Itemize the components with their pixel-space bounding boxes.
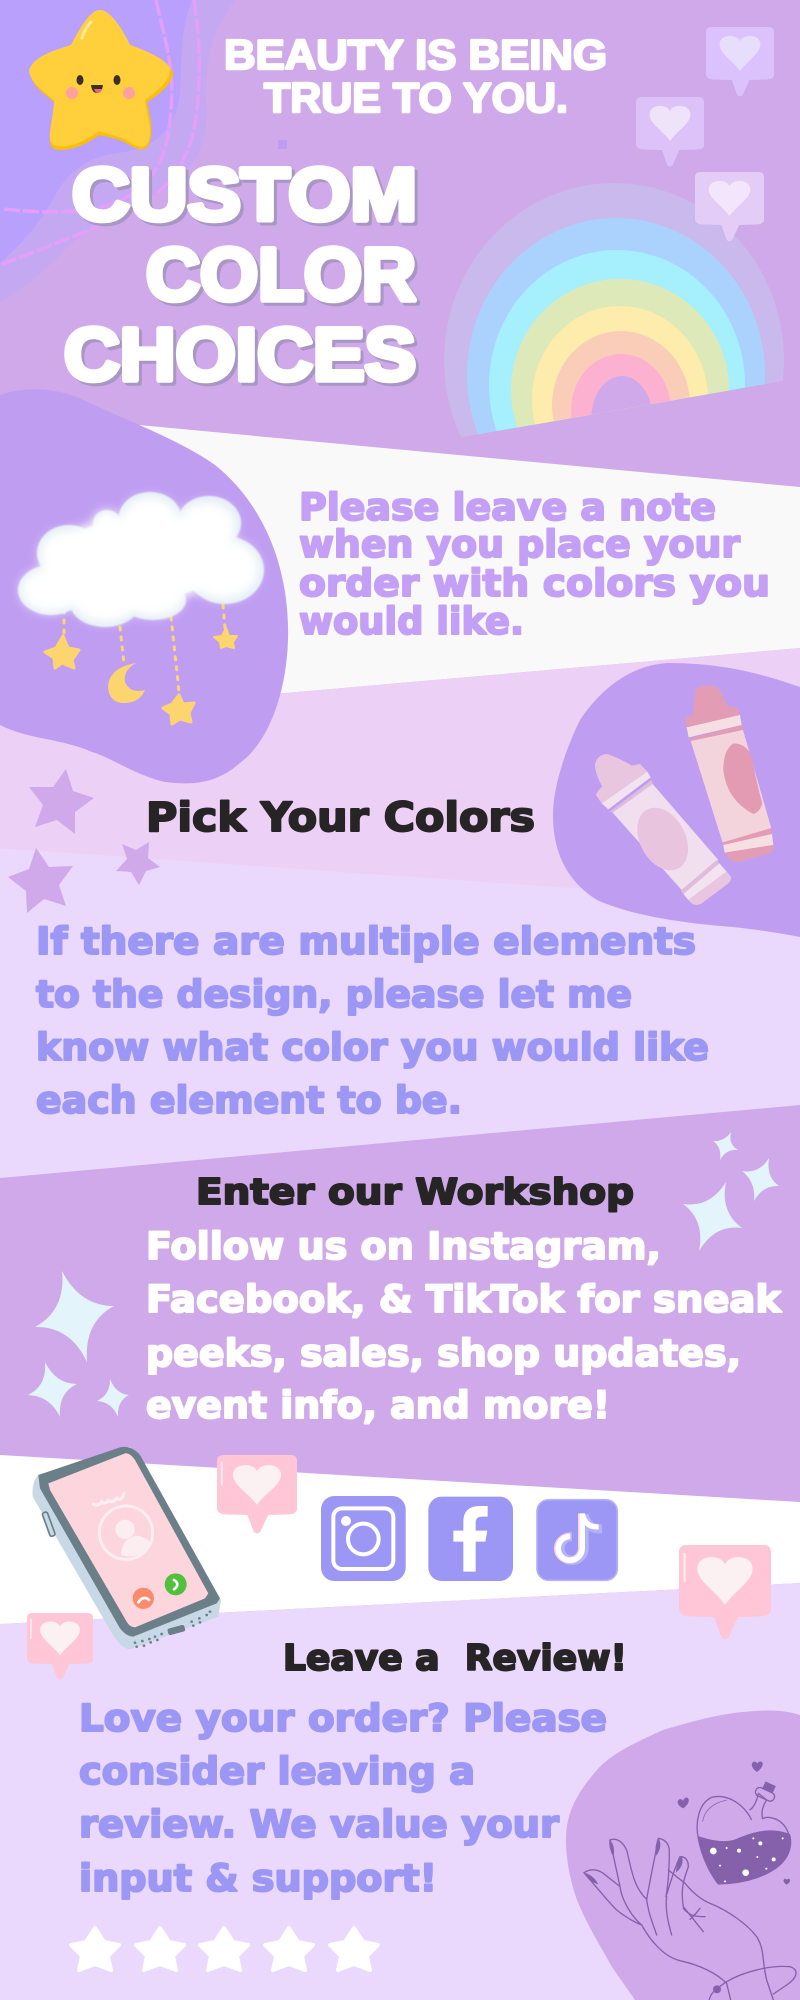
decorative star B [8, 848, 73, 913]
panel: white social band [0, 1455, 800, 1624]
star mid [163, 695, 194, 724]
icon: crayons [595, 685, 774, 905]
cloud body [21, 497, 259, 622]
icon: heart bubble 2 [636, 97, 704, 166]
panel: pink band [0, 648, 800, 910]
text block: follow us: peeks, sales, shop updates, [146, 1332, 741, 1375]
sparkles [28, 1132, 779, 1417]
rating stars [71, 1928, 378, 1970]
hand outline [584, 1838, 796, 2000]
potion liquid [698, 1830, 791, 1884]
text block: leave a note: when you place your [299, 523, 741, 566]
blob: right violet [553, 663, 800, 937]
star right [214, 628, 237, 648]
decorative star C [116, 842, 160, 885]
text block: love your order: review. We value your [79, 1803, 560, 1846]
chains [64, 605, 225, 692]
crayon: rose [685, 685, 774, 862]
potion sparkles [710, 1837, 784, 1882]
text block: multiple elements: to the design, please let me [36, 973, 632, 1016]
heading: pick your colors: Pick Your Colors [146, 795, 535, 841]
icon: yellow star mascot [29, 10, 173, 150]
blob: left violet [0, 389, 288, 783]
potion cork [762, 1781, 776, 1793]
text block: love your order: consider leaving a [79, 1750, 475, 1793]
text block: follow us: Facebook, & TikTok for sneak [146, 1278, 782, 1321]
decorative star A [29, 769, 94, 834]
text block: leave a note: order with colors you [299, 562, 770, 605]
social icons row [321, 1496, 617, 1581]
nails [584, 1838, 721, 1993]
text block: multiple elements [36, 920, 709, 1122]
crayon: pale pink [595, 754, 731, 905]
text block: follow us: Follow us on Instagram, [146, 1225, 661, 1268]
title [64, 153, 417, 396]
icon: heart bubble 3 [695, 172, 764, 241]
text block: multiple elements: know what color you would like [36, 1026, 709, 1069]
tagline: TRUE TO YOU. [264, 74, 568, 121]
icon: cloud with hanging stars and moon [18, 492, 264, 724]
panel: workshop band [0, 1105, 800, 1502]
moon [108, 663, 145, 703]
tagline [224, 31, 607, 121]
text block: love your order: Love your order? Please [79, 1697, 607, 1740]
icon: tiktok [537, 1500, 617, 1580]
speaker dots [134, 1610, 211, 1648]
small square mark [278, 140, 287, 149]
icon: phone [33, 1447, 221, 1649]
text block: leave a note [299, 486, 770, 643]
text block: multiple elements: If there are multiple elements [36, 920, 696, 963]
icon: heart bubble 1 [706, 27, 774, 96]
title: CUSTOM [72, 153, 417, 236]
blob: bottom right [566, 1710, 800, 2000]
icon: hand with heart potion [584, 1761, 796, 2000]
phone bezel [38, 1447, 220, 1637]
icon: pink heart bubble right [679, 1545, 771, 1639]
title: COLOR [146, 233, 416, 316]
panel: lilac band [0, 848, 800, 1200]
side button [42, 1511, 56, 1537]
phone case [33, 1447, 221, 1649]
phone screen [48, 1453, 208, 1627]
icon: instagram [321, 1496, 406, 1581]
text block: love your order [79, 1697, 607, 1900]
name squiggle [93, 1493, 124, 1505]
text block: follow us: event info, and more! [146, 1384, 610, 1427]
heading: leave a review: Leave a Review! [283, 1638, 627, 1679]
panel: review lilac band [0, 1583, 800, 2000]
potion bottle [697, 1786, 790, 1884]
charging port [167, 1625, 186, 1635]
decline button [133, 1588, 154, 1609]
heading: enter our workshop: Enter our Workshop [196, 1172, 634, 1213]
icon: rainbow [444, 183, 784, 437]
star left [45, 636, 79, 668]
background blob: light violet [0, 0, 235, 303]
icon: pink heart bubble top [217, 1455, 297, 1534]
icon: facebook [428, 1497, 513, 1581]
text block: leave a note: Please leave a note [299, 486, 716, 529]
title: CHOICES [64, 313, 416, 396]
background blob: deep violet [0, 0, 192, 263]
icon: pink heart bubble left [27, 1613, 93, 1680]
text block: follow us [146, 1225, 782, 1427]
text block: multiple elements: each element to be. [36, 1079, 462, 1122]
dashed pink lines [0, 0, 199, 265]
background: header panel [0, 0, 800, 500]
text block: leave a note: would like. [299, 600, 524, 643]
accept button [165, 1573, 187, 1595]
floating hearts [678, 1761, 790, 1885]
cloud shadow [18, 492, 264, 627]
panel: white note band [0, 412, 800, 718]
avatar [99, 1506, 153, 1559]
text block: love your order: input & support! [79, 1857, 437, 1900]
tagline: BEAUTY IS BEING [224, 31, 607, 78]
